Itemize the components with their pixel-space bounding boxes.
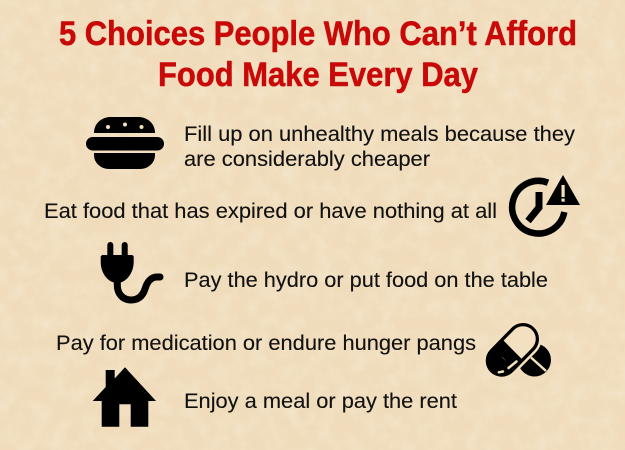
icon: burger <box>86 117 164 169</box>
icon: house <box>93 367 156 427</box>
icon: clock with warning triangle <box>512 175 580 234</box>
text: choice 1 <box>184 123 576 171</box>
text: choice 1: are considerably cheaper <box>184 148 430 171</box>
text: choice 4: Pay for medication or endure hunger pangs <box>56 332 476 355</box>
text: choice 2: Eat food that has expired or have nothing at all <box>44 200 497 223</box>
text: choice 3: Pay the hydro or put food on the table <box>184 269 548 292</box>
title: Food Make Every Day <box>158 56 478 94</box>
icon: electric plug <box>101 245 160 300</box>
title <box>59 15 577 94</box>
icon: pills <box>495 339 551 376</box>
text: choice 1: Fill up on unhealthy meals because they <box>184 123 576 146</box>
text: choice 5: Enjoy a meal or pay the rent <box>184 390 457 413</box>
title: 5 Choices People Who Can’t Afford <box>59 15 577 53</box>
